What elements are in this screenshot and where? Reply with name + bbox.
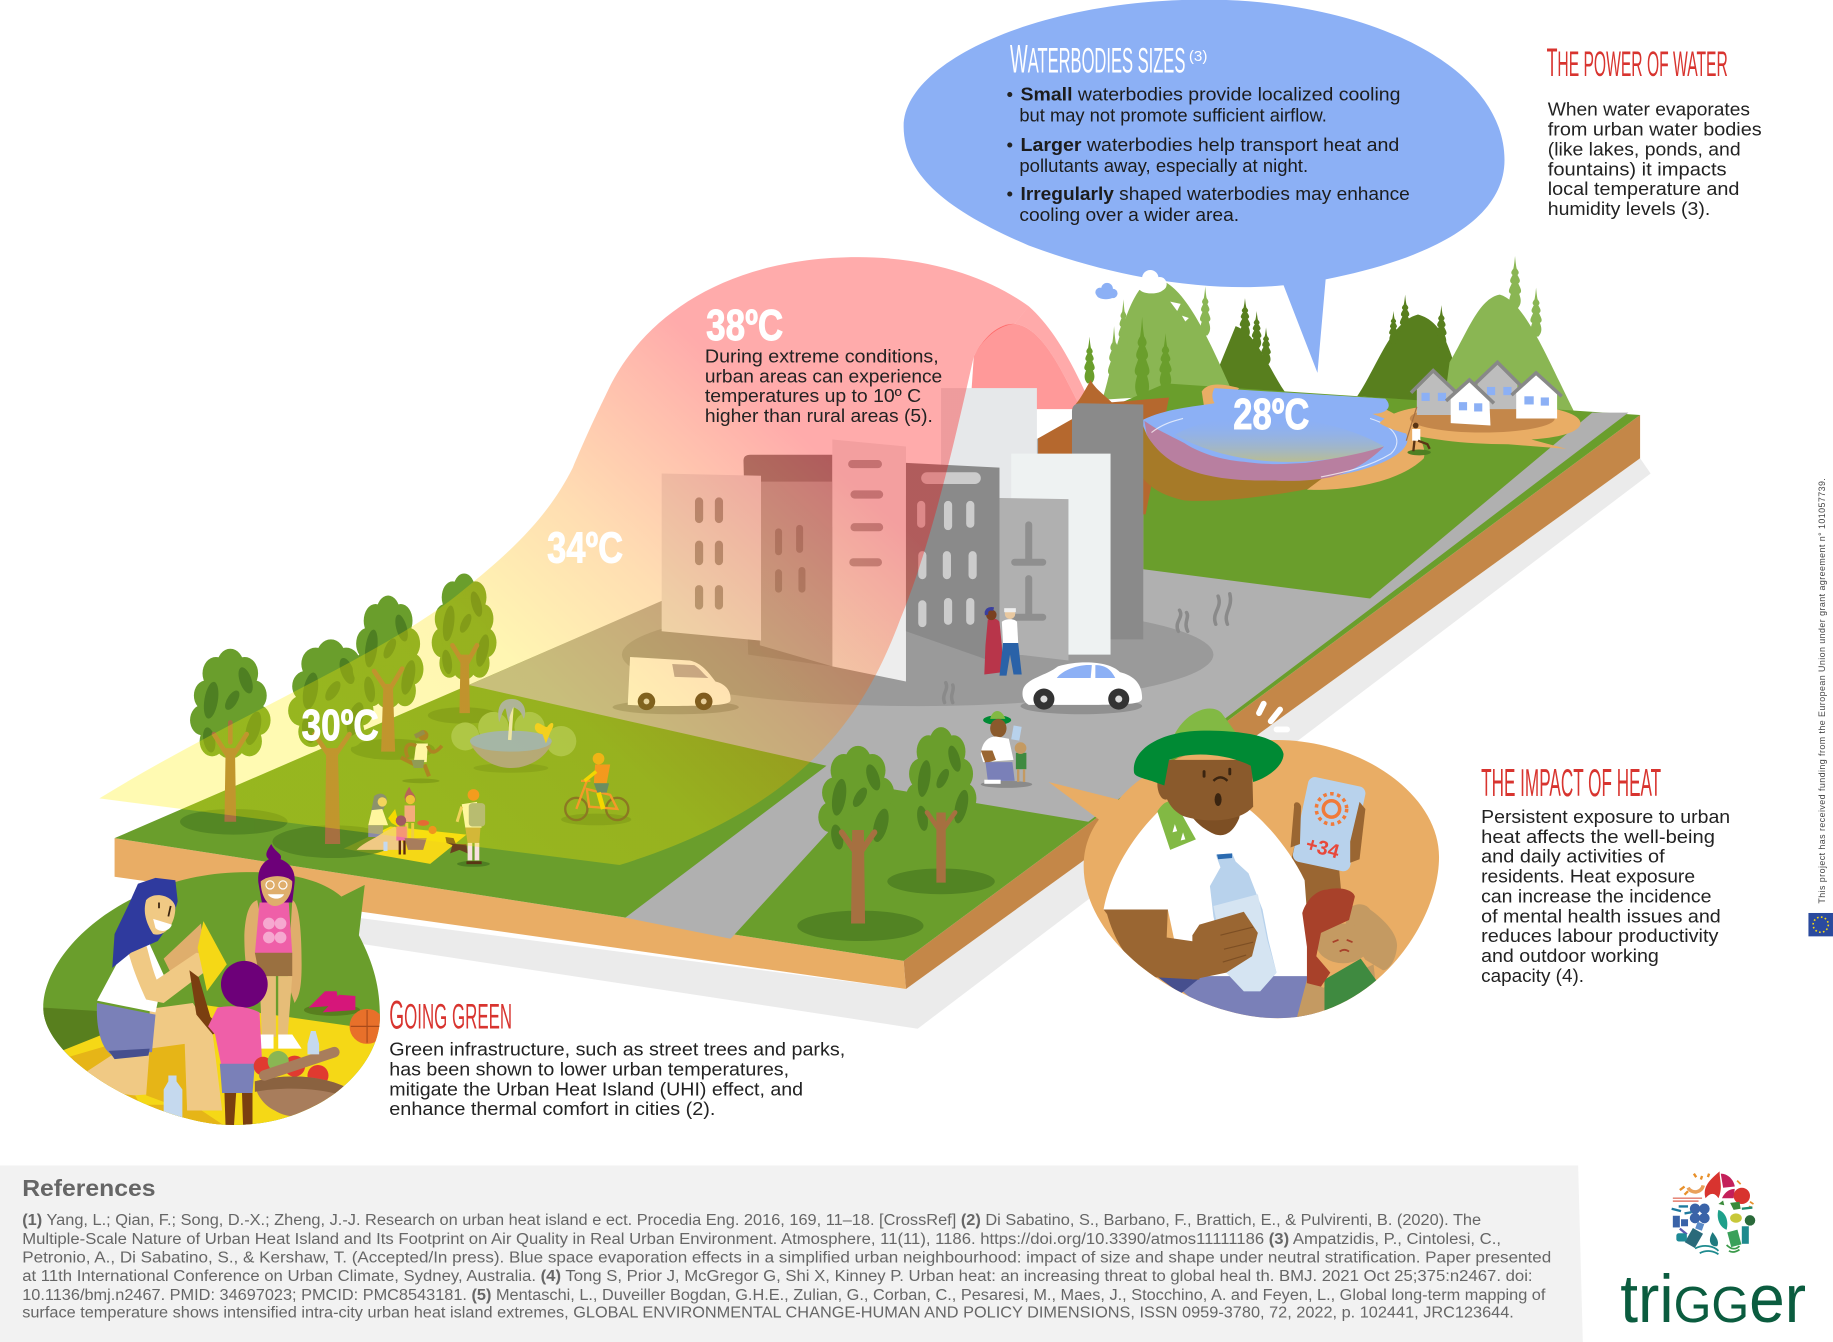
park tree 3 xyxy=(353,596,423,752)
panel: references xyxy=(0,1165,1583,1342)
shirt xyxy=(1104,809,1312,976)
text block: waterbody bullets: pollutants away, especially at night. xyxy=(1019,155,1308,176)
text block: impact of heat: capacity (4). xyxy=(1481,965,1584,986)
park: yellow picnic blanket xyxy=(344,826,466,864)
van xyxy=(613,657,739,714)
raised arm xyxy=(1292,846,1341,904)
picnic family xyxy=(357,787,437,855)
icon: trigger logo emblem xyxy=(1672,1171,1755,1254)
icon: phone with heat warning xyxy=(1291,776,1367,873)
text block: power of water: fountains) it impacts xyxy=(1548,158,1727,179)
tank top xyxy=(97,944,164,1012)
panel: impact of heat illustration xyxy=(1049,704,1439,1029)
funding statement: This project has received funding from the European Union under grant agreement n° 101057739. xyxy=(1817,478,1827,904)
heat wisps xyxy=(944,594,1231,703)
platform: side faces xyxy=(115,415,1640,989)
text block: power of water: from urban water bodies xyxy=(1548,119,1762,140)
heading: going green: GOING GREEN xyxy=(389,994,512,1038)
icon: EU flag xyxy=(1808,913,1833,936)
text block: going green xyxy=(389,1039,845,1119)
park tree 4 xyxy=(432,573,497,713)
tree shadows xyxy=(180,707,498,858)
text block: extreme conditions: urban areas can experience xyxy=(705,365,942,386)
panel: references: Multiple-Scale Nature of Urban Heat Island and Its Footprint on Air Quality in Real Urban Environment. Atmosphere, 11(11), 1186. https://doi.org/10.3390/atmos11111186 (3) Ampatzidis, P., Cintolesi, C., xyxy=(22,1231,1501,1248)
text block: going green: enhance thermal comfort in cities (2). xyxy=(389,1098,715,1119)
road tree 1 xyxy=(818,746,898,924)
man head and hat xyxy=(1161,760,1253,820)
seated woman legs xyxy=(87,1052,150,1096)
arm xyxy=(1104,909,1199,980)
text block: impact of heat: can increase the incidence xyxy=(1481,885,1711,906)
text block: impact of heat xyxy=(1481,806,1730,986)
road tree 2 xyxy=(906,727,976,883)
text block: waterbody bullets: Irregularly shaped waterbodies may enhance xyxy=(1021,183,1410,204)
logo wordmark: trigger: triGGer xyxy=(1620,1262,1806,1337)
text block: impact of heat: Persistent exposure to urban xyxy=(1481,806,1730,827)
text block: extreme conditions: temperatures up to 10º C xyxy=(705,385,921,406)
text block: waterbody bullets: • xyxy=(1007,183,1013,204)
text block: impact of heat: reduces labour productivity xyxy=(1481,925,1719,946)
mountains and pine forest xyxy=(1084,256,1576,415)
text block: impact of heat: and outdoor working xyxy=(1481,945,1659,966)
runner xyxy=(401,730,442,783)
heat dome back layer xyxy=(970,306,1093,409)
text block: going green: has been shown to lower urban temperatures, xyxy=(389,1058,789,1079)
references heading: References xyxy=(22,1175,155,1201)
bowl xyxy=(254,1056,270,1074)
platform ground shadow xyxy=(339,458,1651,1029)
panel: going green illustration xyxy=(35,844,386,1134)
temperature label 30: 30ºC xyxy=(302,702,379,750)
couple xyxy=(984,608,1022,676)
kite xyxy=(198,921,227,991)
superscript reference: (3) xyxy=(1189,48,1207,65)
shoes xyxy=(304,1006,360,1016)
lake xyxy=(1134,385,1424,501)
cyclist xyxy=(561,753,631,825)
buildings xyxy=(662,388,1143,682)
icon: water bottle xyxy=(1210,853,1277,991)
icon: phone with heat warning: +34 xyxy=(1303,833,1342,863)
text: WATERBODIES SIZES xyxy=(1010,37,1185,81)
text block: going green: Green infrastructure, such as street trees and parks, xyxy=(389,1039,845,1060)
brown terrain behind city xyxy=(1038,397,1169,514)
temperature label 28: 28ºC xyxy=(1233,391,1309,439)
ball xyxy=(350,1008,380,1044)
city plaza shadow xyxy=(622,603,1213,706)
text block: extreme conditions: During extreme conditions, xyxy=(705,345,939,366)
hiker with backpack and dog xyxy=(445,789,490,867)
text block: waterbody bullets: Small waterbodies provide localized cooling xyxy=(1021,84,1400,105)
park tree 1 xyxy=(190,649,271,822)
text block: waterbody bullets: • xyxy=(1007,84,1013,105)
heat dome gradient overlay xyxy=(99,257,1029,865)
text block: waterbody bullets: Larger waterbodies help transport heat and xyxy=(1021,134,1399,155)
pants xyxy=(1183,976,1315,1018)
text block: impact of heat: residents. Heat exposure xyxy=(1481,866,1695,887)
child wiping forehead xyxy=(1296,888,1397,1019)
text block: extreme conditions: higher than rural areas (5). xyxy=(705,405,933,426)
platform: green top surface xyxy=(115,383,1640,961)
hand xyxy=(1192,912,1258,980)
brown pine xyxy=(1075,380,1114,404)
car xyxy=(1021,662,1142,714)
near arm xyxy=(129,946,203,1003)
text block: impact of heat: of mental health issues and xyxy=(1481,905,1721,926)
text block: power of water: When water evaporates xyxy=(1548,99,1750,120)
village: houses xyxy=(1379,362,1580,449)
panel: references: Petronio, A., Di Sabatino, S., & Kershaw, T. (Accepted/In press). Blue space evaporation effects in a simplified urban neighbourhood: impact of size and shape under neutral stratification. Paper presented xyxy=(22,1250,1551,1267)
seated woman head and hair xyxy=(112,878,178,968)
temperature label 38: 38ºC xyxy=(706,302,783,350)
text block: extreme conditions xyxy=(705,345,942,426)
neck xyxy=(1193,816,1240,836)
water bubble speech shape xyxy=(904,0,1505,373)
far arm xyxy=(164,924,202,971)
towel xyxy=(1157,801,1196,850)
small farmer with child xyxy=(981,711,1032,788)
text block: waterbody bullets xyxy=(1007,84,1410,225)
fountain xyxy=(451,699,576,773)
park tree 2 xyxy=(288,639,374,844)
child xyxy=(221,961,268,1008)
text block: power of water: (like lakes, ponds, and xyxy=(1548,138,1741,159)
panel: references: (1) Yang, L.; Qian, F.; Song, D.-X.; Zheng, J.-J. Research on urban heat island e ect. Procedia Eng. 2016, 169, 11–18. [CrossRef] (2) Di Sabatino, S., Barbano, F., Brattich, E., & Pulvirenti, B. (2020). The xyxy=(22,1212,1481,1229)
text block: waterbody bullets: • xyxy=(1007,134,1013,155)
panel: references: surface temperature shows intensified intra-city urban heat island extremes, GLOBAL ENVIRONMENTAL CHANGE-HUMAN AND POLICY DIMENSIONS, ISSN 0959-3780, 72, 2022, p. 102441, JRC123644. xyxy=(22,1304,1514,1321)
text block: waterbody bullets: but may not promote sufficient airflow. xyxy=(1019,105,1327,126)
text block: impact of heat: heat affects the well-being xyxy=(1481,826,1715,847)
road trees shadows xyxy=(797,869,995,941)
temperature label 34: 34ºC xyxy=(547,524,623,572)
text block: waterbody bullets: cooling over a wider area. xyxy=(1019,204,1239,225)
road and city ground xyxy=(469,403,1628,939)
text block: going green: mitigate the Urban Heat Island (UHI) effect, and xyxy=(389,1078,803,1099)
panel: references: at 11th International Conference on Urban Climate, Sydney, Australia. (4) Tong S, Prior J, McGregor G, Shi X, Kinney P. Urban heat: an increasing threat to global heal th. BMJ. 2021 Oct 25;375:n2467. doi: xyxy=(22,1268,1533,1285)
text block: power of water: humidity levels (3). xyxy=(1548,198,1710,219)
bottles xyxy=(164,1075,182,1120)
fisherman xyxy=(1406,407,1431,455)
standing woman head and hair xyxy=(258,844,295,906)
standing woman body xyxy=(244,900,302,1003)
icon: heat dashes xyxy=(1259,704,1287,729)
text block: power of water: local temperature and xyxy=(1548,178,1739,199)
text block: impact of heat: and daily activities of xyxy=(1481,846,1666,867)
panel: references: 10.1136/bmj.n2467. PMID: 34697023; PMCID: PMC8543181. (5) Mentaschi, L., Duveiller Bogdan, G.H.E., Zulian, G., Corban, C., Pesaresi, M., Maes, J., Stocchino, A. and Feyen, L., Global long-term mapping of xyxy=(22,1287,1546,1304)
icon: clouds xyxy=(1095,270,1189,321)
text block: power of water xyxy=(1548,99,1762,219)
